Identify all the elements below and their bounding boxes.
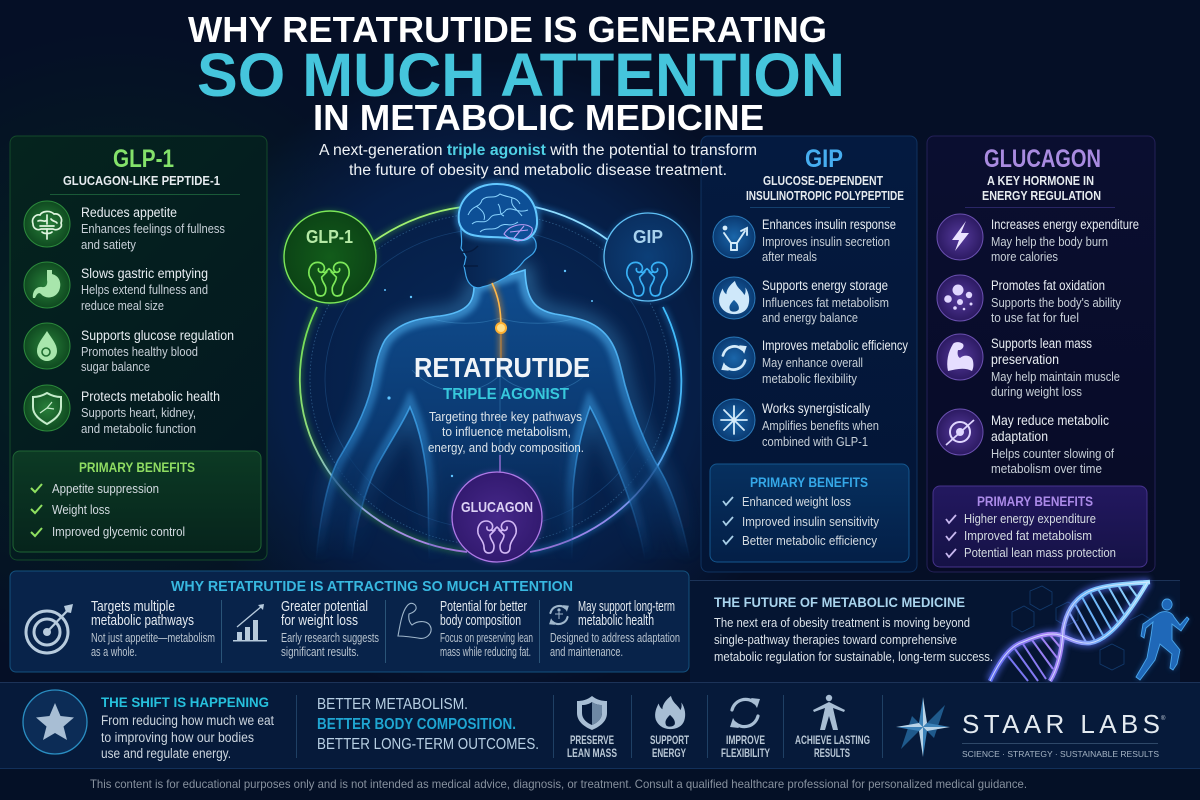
item: slows gastric emptying: Helps extend fullness and — [81, 283, 208, 297]
item: increases energy expenditure: more calories — [991, 250, 1058, 264]
item: promotes fat oxidation: Promotes fat oxidation — [991, 278, 1105, 293]
item: enhances insulin response: Enhances insulin response — [762, 217, 896, 232]
primary benefits: GLUCAGON: PRIMARY BENEFITS — [977, 494, 1093, 509]
column: long-term health — [549, 599, 680, 659]
heading: future: THE FUTURE OF METABOLIC MEDICINE — [714, 594, 965, 610]
heading: GIP: GIP — [805, 145, 843, 173]
column: greater weight loss: for weight loss — [281, 613, 358, 629]
item: supports glucose regulation: Promotes healthy blood — [81, 345, 198, 359]
subtitle: A next-generation triple agonist with the potential to transform — [319, 142, 757, 159]
heading: why attention: WHY RETATRUTIDE IS ATTRACTING SO MUCH ATTENTION — [171, 578, 573, 595]
benefit: preserve lean mass — [567, 696, 617, 760]
item: works synergistically: Amplifies benefits when — [762, 419, 879, 433]
item: increases energy expenditure: May help the body burn — [991, 235, 1108, 249]
icon: brain — [24, 201, 70, 247]
primary benefits: GLUCAGON — [933, 486, 1147, 567]
column: targets multiple pathways: metabolic pathways — [91, 613, 194, 629]
subtitle — [319, 142, 757, 179]
icon: fat droplets — [937, 275, 983, 321]
item: may reduce metabolic adaptation: metabolism over time — [991, 462, 1102, 476]
benefit: support energy: ENERGY — [652, 748, 686, 760]
item: supports glucose regulation: sugar balance — [81, 360, 150, 374]
column: greater weight loss: Early research suggests — [281, 631, 379, 645]
logo: Staar Labs: SCIENCE · STRATEGY · SUSTAINABLE RESULTS — [962, 749, 1159, 759]
item: supports lean mass preservation: Supports lean mass — [991, 336, 1092, 351]
icon: muscle outline — [398, 603, 431, 638]
item: supports lean mass preservation: during weight loss — [991, 385, 1082, 399]
item: may reduce metabolic adaptation: May reduce metabolic — [991, 413, 1109, 428]
subheading: GLUCAGON: ENERGY REGULATION — [982, 188, 1101, 203]
primary benefits: GIP — [710, 464, 909, 562]
text block: future: metabolic regulation for sustainable, long-term success. — [714, 650, 993, 664]
center label: RETATRUTIDE — [414, 352, 590, 383]
node: GLUCAGON: GLUCAGON — [461, 499, 533, 516]
section: future of metabolic medicine — [690, 580, 1189, 682]
item: enhances insulin response: after meals — [762, 250, 817, 264]
item: reduces appetite — [24, 201, 225, 252]
item: improves metabolic efficiency: Improves metabolic efficiency — [762, 338, 908, 353]
primary benefits: GIP: Enhanced weight loss — [742, 495, 851, 509]
sparkles — [384, 270, 593, 477]
item: works synergistically: Works synergistically — [762, 401, 870, 416]
column: long-term health: Designed to address adaptation — [550, 631, 680, 645]
item: supports glucose regulation: Supports glucose regulation — [81, 328, 234, 343]
node: GLP-1 — [283, 210, 377, 304]
icon: compass star — [896, 697, 950, 757]
benefit: improve flexibility: FLEXIBILITY — [721, 748, 770, 760]
item: improves metabolic efficiency: May enhance overall — [762, 356, 863, 370]
item: may reduce metabolic adaptation: adaptation — [991, 429, 1048, 444]
item: promotes fat oxidation: Supports the body's ability — [991, 296, 1122, 310]
subheading: GLUCAGON: A KEY HORMONE IN — [987, 173, 1094, 188]
icon: target — [26, 604, 73, 653]
title — [188, 9, 845, 138]
subheading: GLP-1: GLUCAGON-LIKE PEPTIDE-1 — [63, 173, 220, 188]
primary benefits: GIP: PRIMARY BENEFITS — [750, 475, 868, 490]
text block: shift: to improving how our bodies — [101, 730, 254, 745]
column: targets multiple pathways: Not just appetite—metabolism — [91, 631, 215, 645]
column: targets multiple pathways: as a whole. — [91, 645, 137, 659]
primary benefits: GIP: Better metabolic efficiency — [742, 534, 878, 548]
item: works synergistically — [713, 399, 879, 449]
item: increases energy expenditure — [937, 214, 1139, 264]
center label: TRIPLE AGONIST — [443, 386, 569, 403]
icon: receptor — [713, 216, 755, 258]
center label — [414, 352, 590, 455]
icon: flame — [713, 277, 755, 319]
column: body composition: Focus on preserving lean — [440, 631, 533, 645]
benefit: achieve lasting results: RESULTS — [814, 748, 850, 760]
footer band — [0, 682, 1200, 800]
logo: Staar Labs: ® — [1161, 715, 1166, 722]
text block: future: The next era of obesity treatment is moving beyond — [714, 616, 970, 630]
subheading: GIP: INSULINOTROPIC POLYPEPTIDE — [746, 188, 904, 203]
column: greater weight loss: significant results. — [281, 645, 359, 659]
column: long-term health: metabolic health — [578, 613, 654, 629]
item: supports lean mass preservation: preservation — [991, 352, 1059, 367]
center label: energy, and body composition. — [428, 441, 584, 455]
column: long-term health: May support long-term — [578, 599, 675, 615]
icon: slashed target — [937, 409, 983, 455]
primary benefits: GLP-1 — [13, 451, 261, 552]
primary benefits: GIP: Improved insulin sensitivity — [742, 515, 880, 529]
item: improves metabolic efficiency: metabolic flexibility — [762, 372, 858, 386]
human figure — [316, 184, 690, 560]
brain — [459, 184, 537, 241]
icon: bar chart — [233, 604, 267, 642]
item: may reduce metabolic adaptation — [937, 409, 1114, 476]
primary benefits: GLUCAGON: Potential lean mass protection — [964, 546, 1116, 560]
item: improves metabolic efficiency — [713, 337, 908, 386]
text block: better outcomes: BETTER LONG-TERM OUTCOMES. — [317, 736, 539, 753]
icon: runner — [1136, 599, 1189, 680]
item: promotes fat oxidation: to use fat for fuel — [991, 311, 1079, 325]
benefit: achieve lasting results: ACHIEVE LASTING — [795, 735, 870, 747]
column: body composition: body composition — [440, 613, 521, 629]
pathway ring — [300, 207, 681, 552]
item: reduces appetite: Reduces appetite — [81, 205, 177, 220]
item: supports lean mass preservation — [937, 334, 1120, 399]
item: slows gastric emptying — [24, 262, 208, 313]
primary benefits: GLP-1: Weight loss — [52, 503, 110, 517]
item: protects metabolic health: Protects metabolic health — [81, 389, 220, 404]
neural pathway — [492, 283, 506, 472]
node: GIP: GIP — [633, 227, 663, 247]
column: body composition: mass while reducing fat. — [440, 645, 531, 659]
subheading: GLUCAGON — [982, 173, 1101, 203]
text block: shift: THE SHIFT IS HAPPENING — [101, 694, 269, 710]
item: slows gastric emptying: Slows gastric emptying — [81, 266, 208, 281]
text block: future — [714, 616, 993, 664]
item: promotes fat oxidation — [937, 275, 1122, 325]
center label: Targeting three key pathways — [429, 410, 582, 424]
node: GIP — [603, 212, 693, 302]
benefit: improve flexibility — [721, 698, 770, 760]
icon: flexed arm — [937, 334, 983, 380]
item: protects metabolic health: and metabolic function — [81, 422, 196, 436]
column: targets multiple pathways — [26, 599, 215, 659]
item: may reduce metabolic adaptation: Helps counter slowing of — [991, 447, 1114, 461]
text block: shift: use and regulate energy. — [101, 746, 231, 761]
benefit: support energy: SUPPORT — [650, 735, 689, 747]
item: works synergistically: combined with GLP-1 — [762, 435, 868, 449]
logo: Staar Labs — [896, 697, 1166, 759]
text block: future: single-pathway therapies toward comprehensive — [714, 633, 957, 647]
title: WHY RETATRUTIDE IS GENERATING — [188, 9, 827, 50]
item: supports lean mass preservation: May help maintain muscle — [991, 370, 1120, 384]
text block: shift: From reducing how much we eat — [101, 713, 274, 728]
primary benefits: GLP-1: Appetite suppression — [52, 482, 159, 496]
icon: shield — [24, 385, 70, 431]
node: GLP-1: GLP-1 — [306, 227, 353, 247]
benefit: achieve lasting results — [795, 695, 870, 760]
item: protects metabolic health: Supports heart, kidney, — [81, 406, 196, 420]
item: supports energy storage: and energy balance — [762, 311, 858, 325]
subtitle: the future of obesity and metabolic disease treatment. — [349, 162, 727, 179]
item: reduces appetite: Enhances feelings of fullness — [81, 222, 225, 236]
panel: GLP-1 — [10, 136, 267, 560]
subheading: GIP: GLUCOSE-DEPENDENT — [763, 173, 883, 188]
benefit: support energy — [650, 696, 689, 760]
benefit: preserve lean mass: PRESERVE — [570, 735, 614, 747]
subheading: GIP — [746, 173, 904, 203]
panel: GLUCAGON — [927, 136, 1155, 572]
text block: better outcomes: BETTER BODY COMPOSITION. — [317, 716, 516, 733]
item: increases energy expenditure: Increases energy expenditure — [991, 217, 1139, 232]
text block: better outcomes — [317, 696, 539, 753]
icon: stomach — [24, 262, 70, 308]
benefit: improve flexibility: IMPROVE — [726, 735, 765, 747]
item: supports energy storage: Influences fat metabolism — [762, 296, 889, 310]
icon: lightning — [937, 214, 983, 260]
primary benefits: GLP-1: Improved glycemic control — [52, 525, 185, 539]
title: SO MUCH ATTENTION — [197, 41, 845, 109]
primary benefits: GLUCAGON: Improved fat metabolism — [964, 529, 1092, 543]
item: supports energy storage — [713, 277, 889, 325]
item: enhances insulin response: Improves insulin secretion — [762, 235, 890, 249]
central diagram — [283, 184, 693, 563]
icon: drop — [24, 323, 70, 369]
item: protects metabolic health — [24, 385, 220, 436]
item: supports energy storage: Supports energy storage — [762, 278, 888, 293]
heading: GLUCAGON: GLUCAGON — [984, 145, 1101, 173]
icon: burst — [713, 399, 755, 441]
item: slows gastric emptying: reduce meal size — [81, 299, 164, 313]
column: long-term health: and maintenance. — [550, 645, 623, 659]
item: supports glucose regulation — [24, 323, 234, 374]
heading: GLP-1: GLP-1 — [113, 145, 174, 173]
column: greater weight loss — [233, 599, 379, 659]
disclaimer: This content is for educational purposes only and is not intended as medical advice, diagnosis, or treatment. Consult a qualified healthcare professional for personalized medical guidance. — [90, 777, 1027, 791]
primary benefits: GLP-1: PRIMARY BENEFITS — [79, 460, 195, 475]
icon: star badge — [23, 690, 87, 754]
column: body composition: Potential for better — [440, 599, 527, 615]
hexagon network — [1012, 586, 1152, 670]
primary benefits: GLUCAGON: Higher energy expenditure — [964, 512, 1096, 526]
item: reduces appetite: and satiety — [81, 238, 137, 252]
panel: why attention — [10, 571, 689, 672]
head — [461, 195, 536, 288]
text block: shift — [101, 694, 274, 761]
center label: to influence metabolism, — [442, 425, 571, 439]
column: targets multiple pathways: Targets multiple — [91, 599, 175, 615]
column: greater weight loss: Greater potential — [281, 599, 368, 615]
title: IN METABOLIC MEDICINE — [313, 97, 764, 138]
column: body composition — [398, 599, 533, 659]
icon: cycle with figure — [549, 605, 569, 625]
benefit: preserve lean mass: LEAN MASS — [567, 748, 617, 760]
item: enhances insulin response — [713, 216, 896, 264]
text block: better outcomes: BETTER METABOLISM. — [317, 696, 468, 713]
logo: Staar Labs: STAAR LABS — [962, 709, 1160, 739]
icon: DNA helix — [990, 582, 1150, 681]
node: GLUCAGON — [451, 471, 543, 563]
icon: cycle arrows — [713, 337, 755, 379]
panel: GIP — [701, 136, 917, 572]
